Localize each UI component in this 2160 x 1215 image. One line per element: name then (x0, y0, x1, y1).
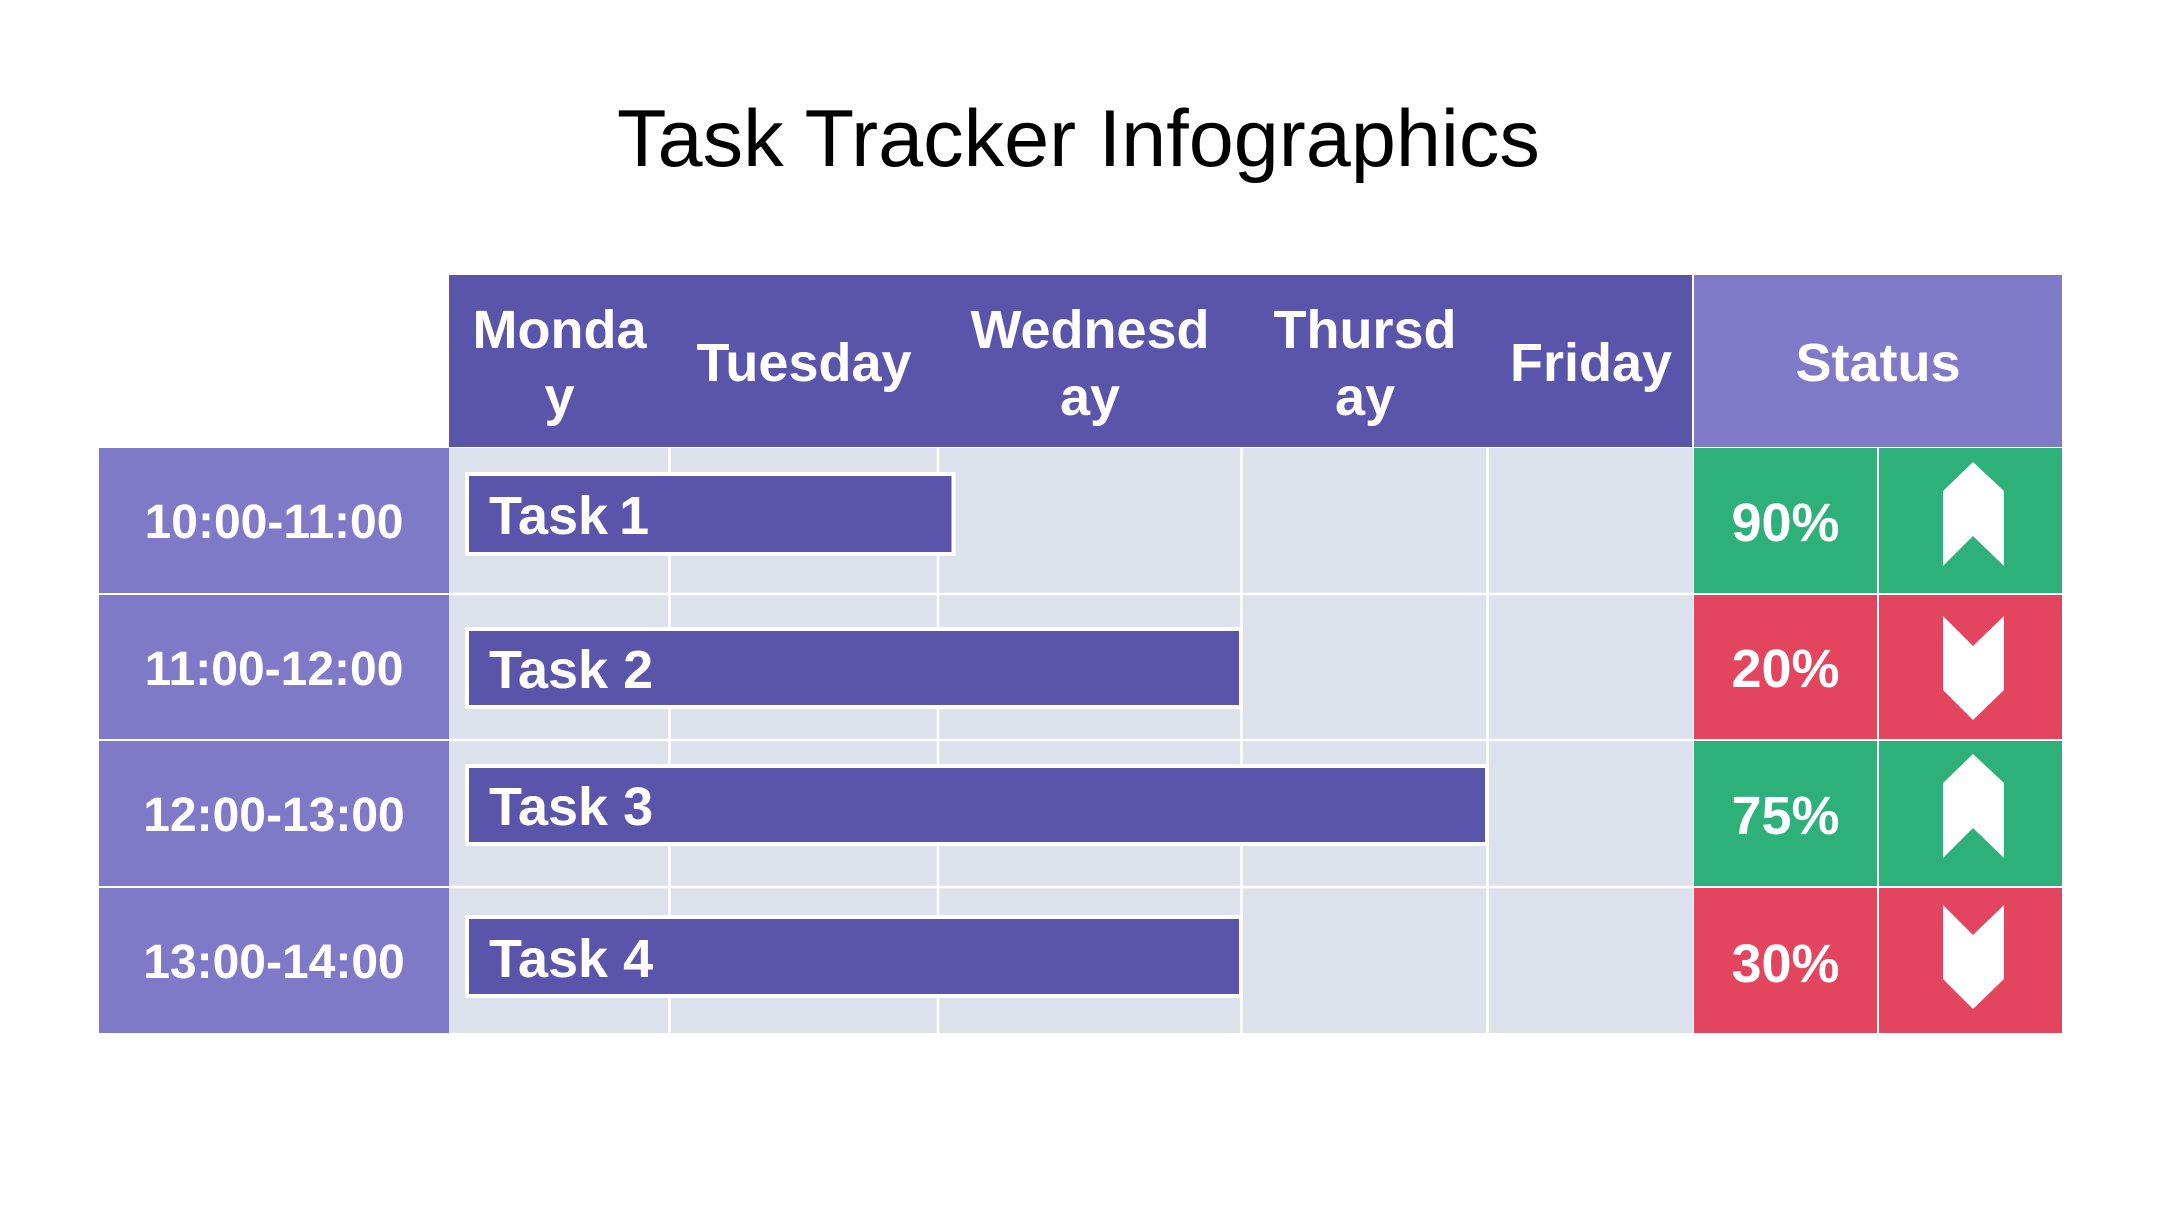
task bar 2 (467, 629, 1241, 707)
heading: Wednesday: Wednesd (970, 300, 1210, 360)
panel: status header (1694, 275, 2062, 447)
task bar 3: Task 3 (489, 777, 653, 837)
status row 2: 20% (1731, 639, 1840, 699)
time slot 4: 13:00-14:00 (143, 936, 405, 989)
status row 4: 30% (1731, 934, 1840, 994)
panel: time column (99, 448, 449, 1033)
heading: Friday: Friday (1510, 333, 1672, 393)
time slot 1: 10:00-11:00 (145, 496, 403, 549)
title: Task Tracker Infographics (617, 94, 1540, 184)
icon: up arrow (1943, 462, 2004, 566)
icon: up arrow (1943, 754, 2004, 858)
task bar 4: Task 4 (489, 929, 653, 989)
panel: status header: Status (1795, 333, 1961, 393)
time slot 1 (99, 448, 449, 593)
time slot 2: 11:00-12:00 (145, 643, 403, 696)
panel: day header (449, 275, 1692, 447)
heading: Tuesday: Tuesday (696, 333, 912, 393)
heading: Thursday: ay (1335, 367, 1395, 427)
status row 1 (1694, 448, 2062, 593)
task bar 2: Task 2 (489, 640, 653, 700)
panel: schedule grid (449, 448, 1693, 1033)
time slot 2 (99, 595, 449, 739)
heading: Monday: Monda (473, 300, 647, 360)
time slot 3 (99, 741, 449, 886)
status row 1: 90% (1731, 493, 1840, 553)
task bar 4 (467, 917, 1241, 996)
status row 3 (1694, 741, 2062, 886)
status row 4 (1694, 888, 2062, 1033)
heading: Monday: y (544, 367, 575, 427)
task bar 3 (467, 766, 1487, 844)
time slot 4 (99, 888, 449, 1033)
task bar 1: Task 1 (489, 486, 649, 546)
status row 2 (1694, 595, 2062, 739)
heading: Thursday: Thursd (1274, 300, 1456, 360)
icon: down arrow (1943, 616, 2004, 720)
status row 3: 75% (1731, 786, 1840, 846)
heading: Wednesday: ay (1060, 367, 1120, 427)
task bar 1 (467, 474, 954, 554)
icon: down arrow (1943, 905, 2004, 1009)
time slot 3: 12:00-13:00 (143, 789, 405, 842)
